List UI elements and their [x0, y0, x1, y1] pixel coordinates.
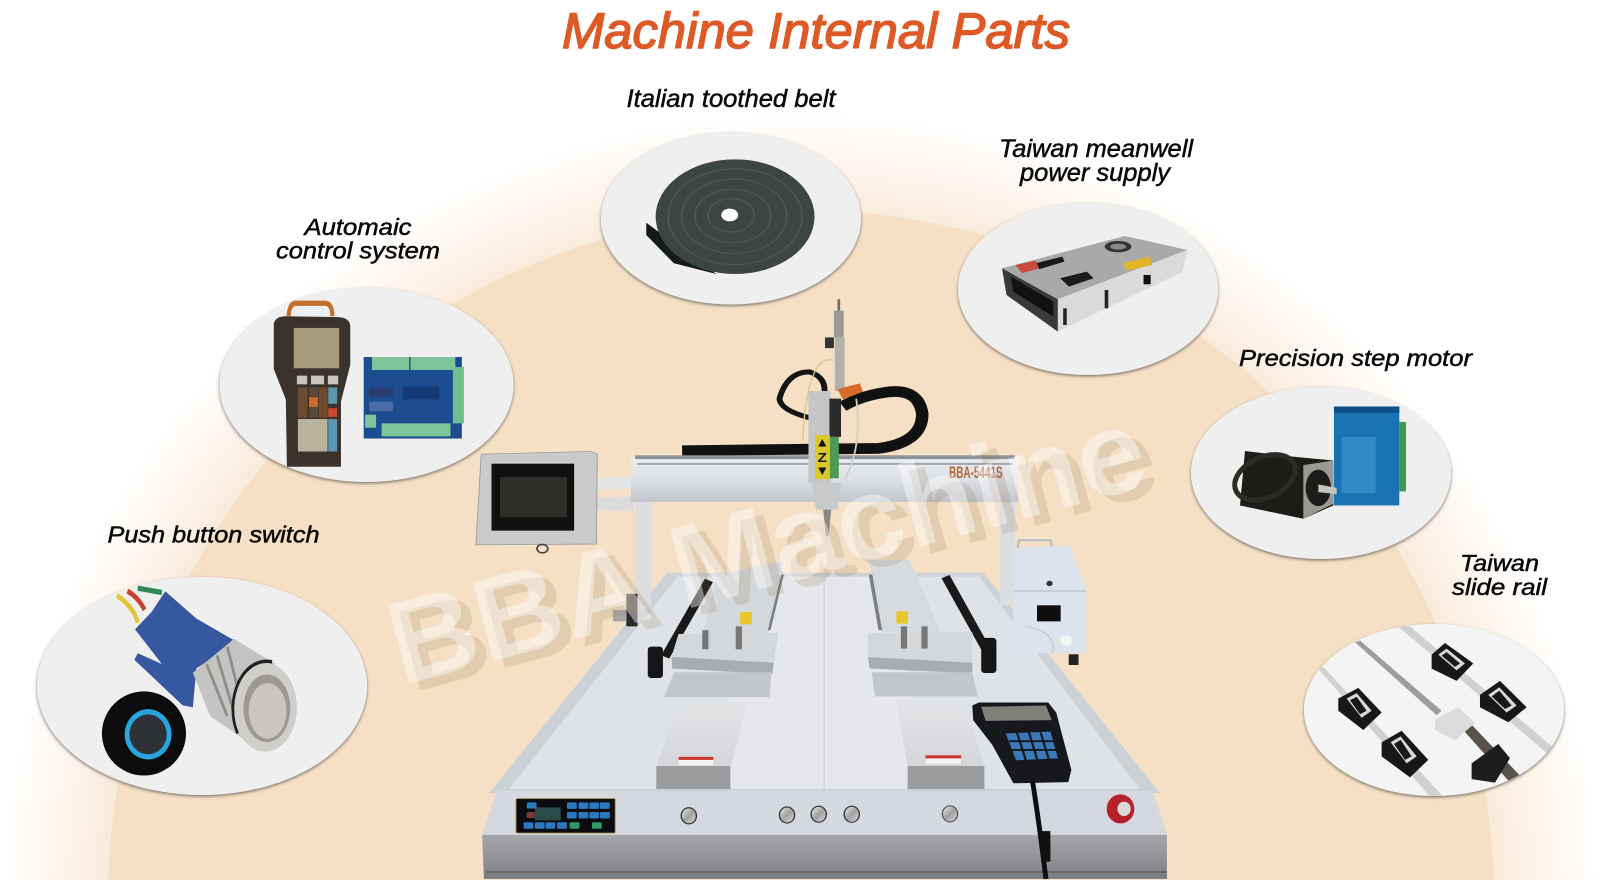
left rear slide: [702, 561, 784, 634]
icon: power supply unit: [1002, 236, 1187, 332]
right fixture: [868, 626, 978, 696]
label: Taiwan slide rail: slide rail: [1452, 574, 1548, 600]
icon: motor and driver: [1228, 406, 1406, 519]
oval: belt: [601, 132, 861, 304]
left fixture: [664, 626, 779, 697]
silver switch body: [193, 639, 297, 752]
left front slide: [656, 701, 748, 789]
wires: [117, 588, 162, 623]
right front slide: [896, 699, 984, 789]
dispensing head: Z: [818, 450, 827, 465]
label: Taiwan meanwell power supply: [999, 135, 1194, 187]
watermark shadow: BBA Machine: [385, 389, 1170, 718]
ball nut: [1435, 707, 1475, 741]
gantry posts: [635, 498, 1015, 609]
bearing block: [1432, 643, 1473, 681]
machine table: [489, 573, 1160, 793]
oval: slide rail: [1304, 624, 1564, 796]
label: Taiwan slide rail: [1452, 550, 1548, 600]
air regulator: [613, 594, 637, 626]
handheld controller: [274, 303, 350, 467]
panel: Automatic control system: [220, 214, 514, 482]
panel: Italian toothed belt: [601, 85, 861, 304]
handheld pendant on table: [972, 703, 1071, 879]
label: control system: control system: [276, 238, 440, 264]
screw support: [1472, 744, 1510, 783]
icon: push button switches: [102, 588, 297, 776]
left drag chain: [648, 580, 709, 678]
driver: [1334, 406, 1406, 505]
gantry beam: [631, 455, 1018, 502]
touch screen: [476, 451, 634, 553]
dispensing head: [779, 299, 863, 536]
bearing block: [1338, 688, 1382, 730]
panel: Taiwan meanwell power supply: [958, 135, 1218, 375]
control box: [1012, 540, 1086, 665]
front panel: [482, 791, 1167, 879]
label: Taiwan slide rail: Taiwan: [1460, 550, 1539, 576]
blue connector: [134, 591, 238, 707]
label: control system: Automaic: [302, 214, 412, 240]
label: Taiwan meanwell power supply: power supply: [1019, 159, 1172, 187]
oval: push button: [37, 577, 367, 795]
right rear slide: [869, 559, 940, 632]
oval: step motor: [1191, 387, 1451, 559]
emergency stop: [1107, 794, 1134, 823]
watermark: BBA Machine: [374, 382, 1159, 711]
label: Push button switch: Push button switch: [108, 522, 320, 548]
icon: controller and board: [274, 303, 464, 467]
bearing block: [1382, 731, 1428, 777]
motor: [1228, 446, 1337, 519]
oval: power supply: [958, 203, 1218, 375]
icon: belt roll: [646, 159, 815, 274]
icon: slide rails and ball screw: [1317, 627, 1553, 797]
black illuminated button: [102, 691, 186, 776]
oval: control system: [220, 288, 514, 482]
label: Italian toothed belt: Italian toothed belt: [626, 85, 837, 113]
keypad panel: [516, 799, 615, 833]
panel: Precision step motor: [1191, 345, 1473, 559]
cable chain: [682, 391, 922, 451]
background arc: [108, 210, 1494, 880]
gantry beam: BBA-5441S: [949, 463, 1003, 482]
title: Machine Internal Parts: [562, 3, 1070, 59]
panel: Taiwan slide rail: [1304, 550, 1564, 797]
central machine: [476, 299, 1167, 879]
bearing block: [1480, 681, 1527, 722]
label: control system: [276, 214, 440, 264]
label: Precision step motor: Precision step motor: [1239, 345, 1473, 371]
blue control board: [364, 357, 464, 439]
push buttons on panel: [681, 806, 958, 824]
panel: Push button switch: [37, 522, 367, 795]
label: Taiwan meanwell power supply: Taiwan meanwell: [999, 135, 1194, 163]
right drag chain: [946, 577, 996, 673]
